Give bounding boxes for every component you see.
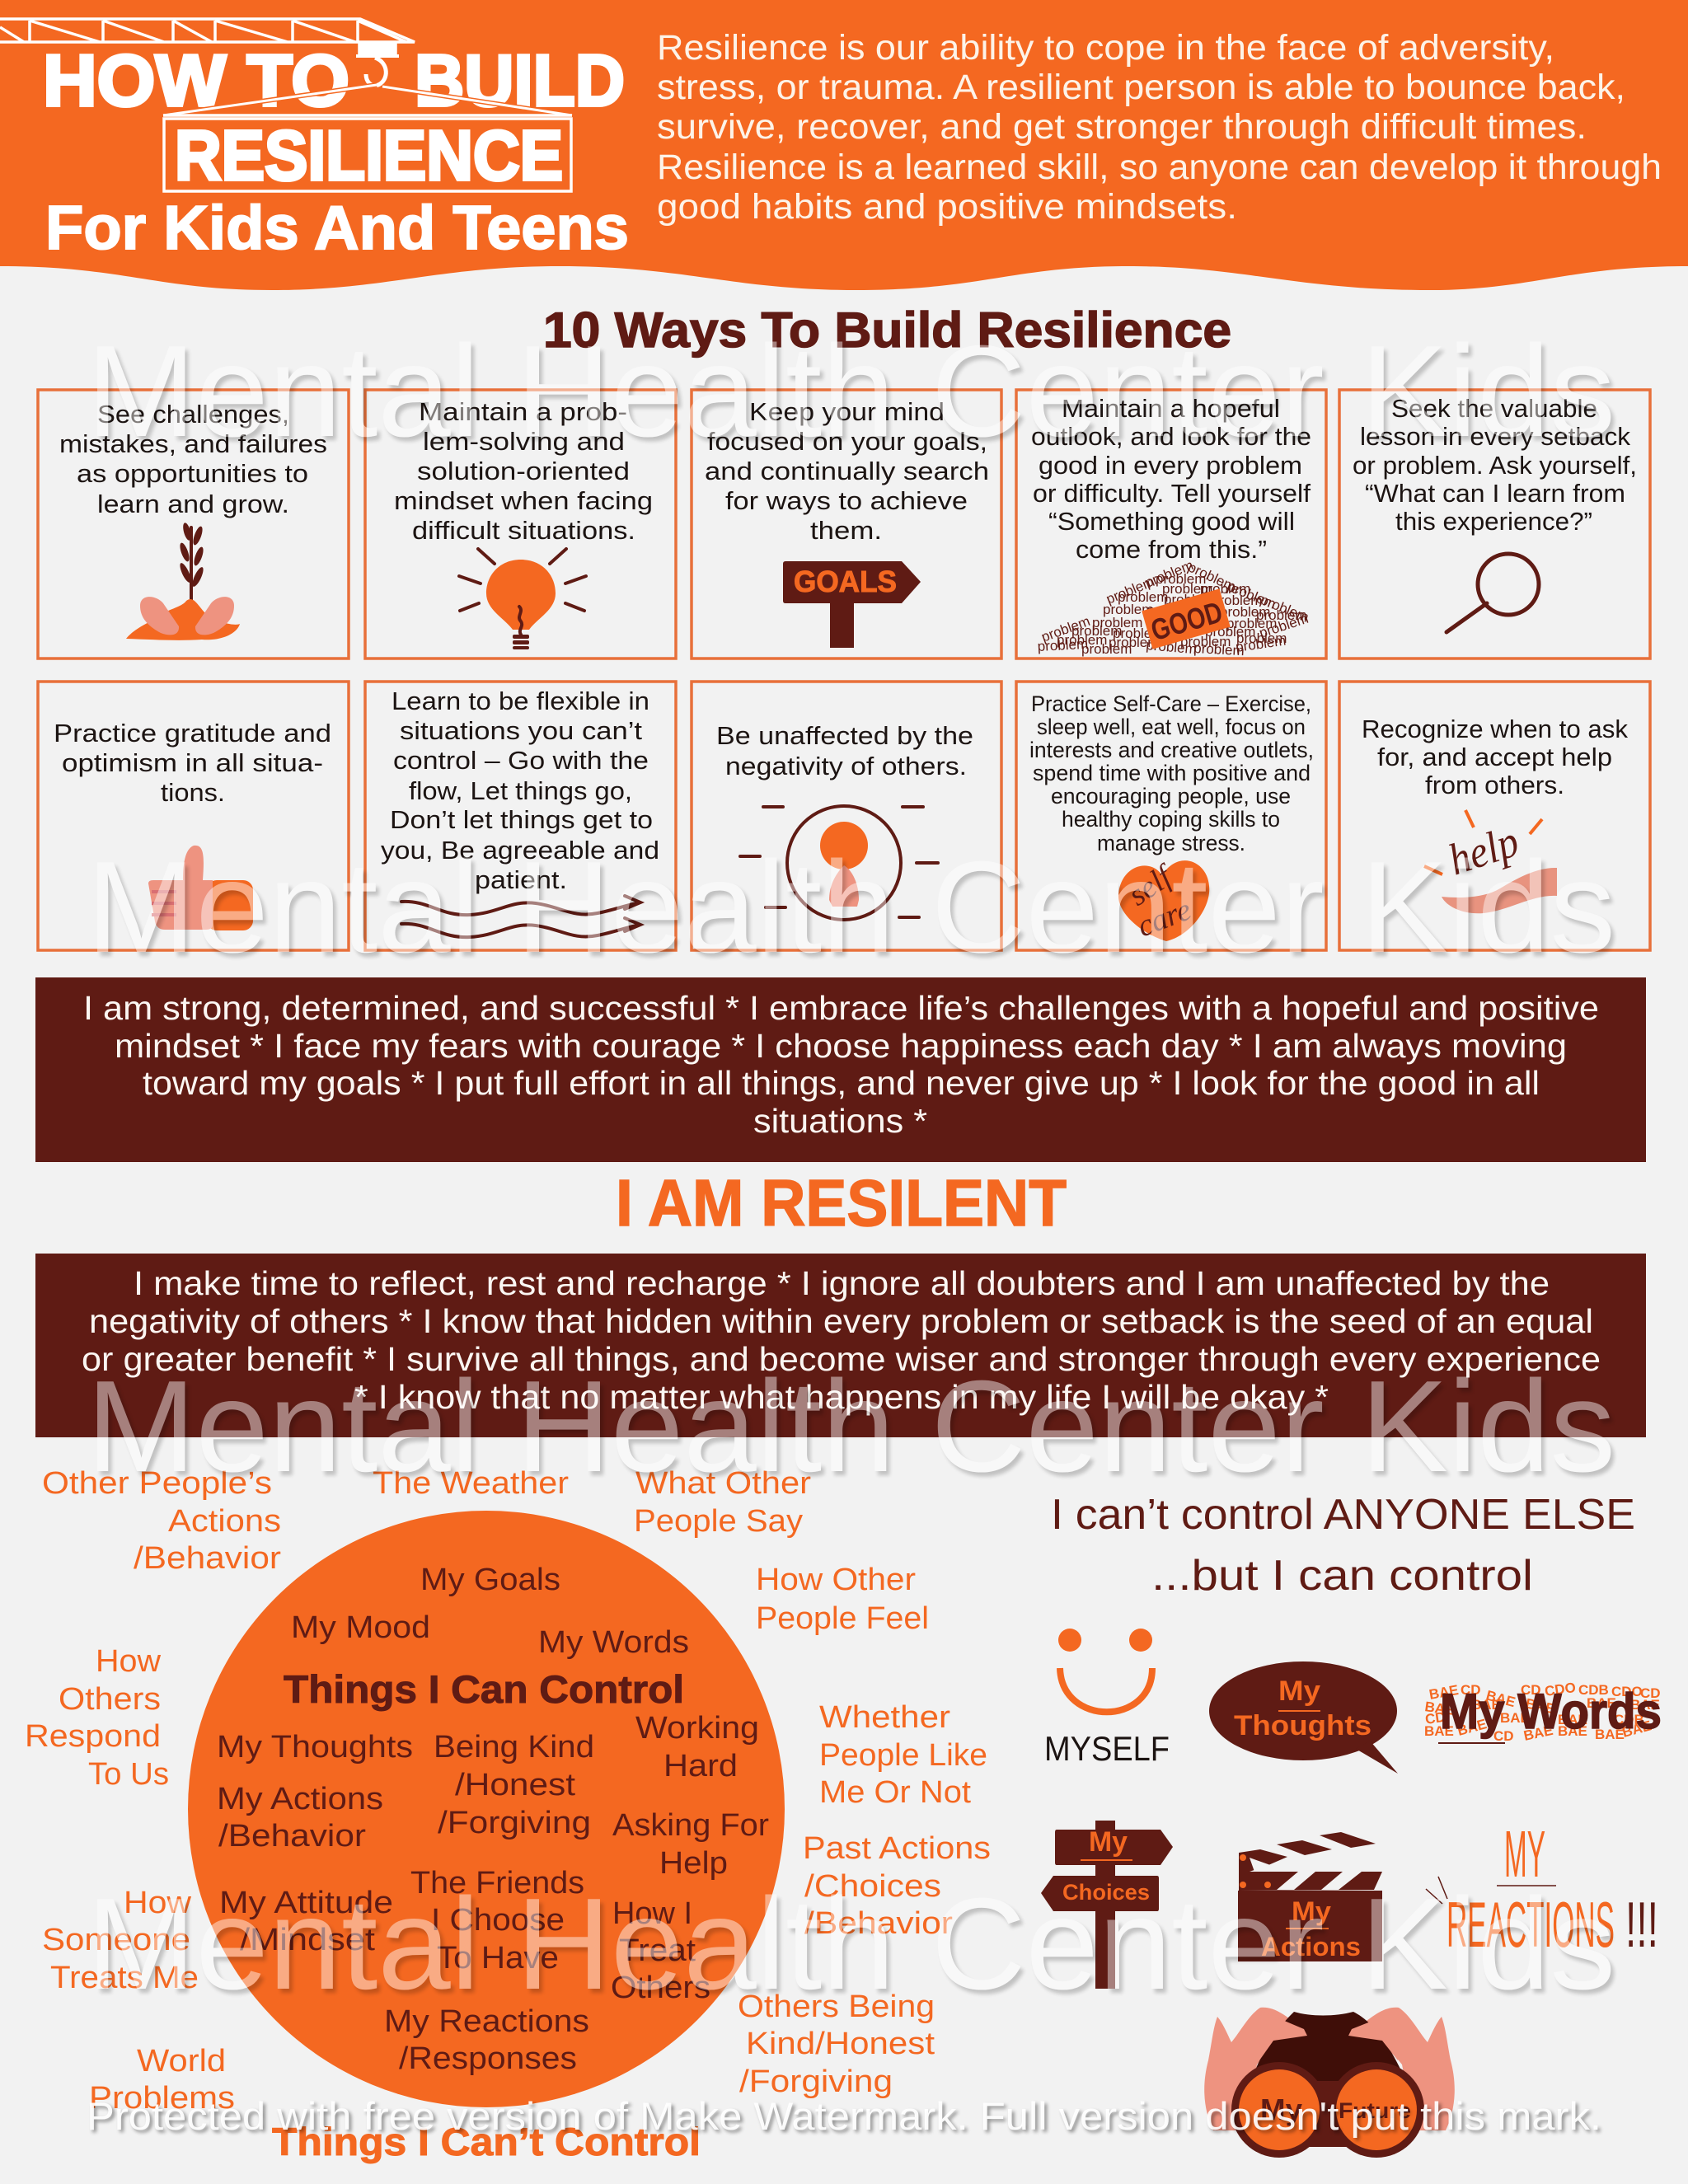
text: way 1 [59,400,327,518]
header banner [0,0,1688,290]
text: way 6 [54,719,331,807]
word pile: problem [1205,624,1255,640]
text: way 4: come from this.” [1076,535,1267,564]
title: for kids and teens: For Kids And Teens [45,193,629,262]
icon: my future binoculars [1204,2008,1455,2158]
icon: my choices signpost: My [1089,1826,1128,1858]
text: way 7 [381,687,659,894]
icon: goals sign: GOALS [794,565,897,598]
text: way 3: Keep your mind [749,397,945,426]
icon: good within problem pile [1037,557,1311,658]
icon: my reactions lettering [1426,1817,1658,1961]
affirmation text 2 [82,1264,1601,1416]
things I can control list: /Mindset [240,1923,375,1957]
scattered letters: CDB [1614,1712,1644,1727]
affirmation text 1 [83,989,1599,1140]
text: way 5: “What can I learn from [1365,479,1625,508]
intro text [657,28,1662,227]
watermarks: Mental Health Center Kids [87,1354,1615,1499]
watermarks: Mental Health Center Kids [87,835,1615,980]
icon: my thoughts bubble: Thoughts [1234,1710,1372,1741]
text: way 1: See challenges, [97,400,289,429]
word pile: problem [1039,613,1092,645]
title: resilience box: RESILIENCE [175,117,563,195]
scattered letters: BAE [1558,1712,1587,1727]
things I can control list: My Attitude [219,1886,393,1920]
things I can't control list: /Choices [804,1869,941,1904]
word pile: problem [1164,592,1214,607]
text: way 10: Recognize when to ask [1362,715,1628,743]
things I can control list: The Friends [410,1866,584,1900]
word pile: problem [1118,589,1168,605]
text: way 5 [1353,394,1637,536]
word pile: problem [1156,571,1206,587]
text: way 7: patient. [475,865,567,894]
panel: way 8 unaffected [692,682,1001,950]
watermarks: Protected with free version of Make Watermark. Full version doesn't put this mark. [87,2094,1601,2138]
scattered letters: CD [1640,1685,1661,1701]
affirmation text 2: negativity of others * I know that hidden within every problem or setback is the seed of an equal [89,1302,1593,1340]
panel: way 1 challenges [38,390,349,658]
icon: my actions clapperboard: Actions [1261,1932,1361,1961]
things I can't control list: Others [59,1682,161,1717]
scattered letters: CDO [1611,1684,1643,1699]
things I can control list: My Reactions [384,2004,589,2039]
text: way 4: Maintain a hopeful [1062,394,1280,423]
scattered letters: BAE [1471,1697,1501,1713]
things I can't control list: People Say [634,1504,803,1539]
icon: my choices signpost [1041,1821,1173,1989]
text: way 4: or difficulty. Tell yourself [1033,479,1311,508]
word pile: problem [1103,602,1153,617]
icon: sprout in hands [126,522,240,640]
word pile: problem [1113,626,1163,641]
intro text: survive, recover, and get stronger through difficult times. [657,107,1587,147]
scattered letters: BAE [1428,1682,1460,1703]
word pile: problem [1147,602,1198,618]
text: way 8: Be unaffected by the [716,721,973,750]
text: way 4: good in every problem [1039,451,1302,480]
affirmation text 1: mindset * I face my fears with courage * I choose happiness each day * I am always moving [115,1027,1567,1065]
panel: way 6 gratitude [38,682,349,950]
things I can control list: Being Kind [434,1730,594,1765]
text: way 2: difficult situations. [412,516,635,545]
text: way 2: Maintain a prob- [419,397,627,426]
icon: thumbs up [148,846,253,930]
word pile: problem [1180,634,1231,649]
icon: light bulb [459,549,586,649]
things I can't control list: Other People’s [42,1466,272,1501]
affirmation text 1: toward my goals * I put full effort in all things, and never give up * I look for the good in all [143,1064,1540,1102]
text: way 9: encouraging people, use [1051,784,1291,808]
scattered letters: BAE [1587,1695,1616,1711]
panel: way 4 hopeful outlook [1016,390,1326,658]
text: way 9: manage stress. [1097,831,1245,855]
things I can't control list: Others Being [738,1990,935,2024]
watermarks [87,319,1615,2138]
panel: way 7 flexibility [365,682,676,950]
text: way 5: or problem. Ask yourself, [1353,451,1637,480]
text: way 9: interests and creative outlets, [1029,738,1314,762]
things I can control list: My Actions [217,1782,383,1816]
things I can control list: /Behavior [218,1819,366,1854]
text: way 9: healthy coping skills to [1062,807,1280,832]
things I can control list: /Forgiving [438,1806,591,1840]
things I can control list: /Honest [455,1768,575,1802]
text: way 8: negativity of others. [725,752,967,780]
affirmations band 2 [35,1254,1646,1437]
text: way 9: spend time with positive and [1033,761,1311,785]
things I can't control list: /Forgiving [739,2064,893,2099]
text: way 9: Practice Self-Care – Exercise, [1031,691,1311,716]
scattered letters: BAE [1423,1699,1456,1718]
things I can't control list: Me Or Not [819,1775,971,1810]
things I can control list: Asking For [612,1808,769,1843]
things I can't control list: People Feel [756,1601,929,1636]
icon: my choices signpost: Choices [1062,1880,1150,1905]
text: way 10: from others. [1425,771,1564,799]
title: how to build [43,40,625,121]
icon: crane truss and hook [0,19,572,115]
word pile: problem [1142,557,1195,591]
watermarks: Mental Health Center Kids [87,1872,1615,2017]
text: way 3: and continually search [705,457,989,485]
text: way 10 [1362,715,1628,799]
title: how to build: HOW TO [43,40,349,121]
scattered letters: CDO [1544,1680,1577,1699]
text: way 2: lem-solving and [423,427,625,456]
word pile [1037,557,1311,658]
word pile: problem [1226,579,1278,612]
icon: my future binoculars: Future [1339,2098,1411,2123]
icon: helping hand [1424,810,1557,913]
heading: I can't control anyone else [1051,1491,1635,1600]
icon: my reactions lettering: MY [1504,1817,1545,1891]
word pile: problem [1092,615,1142,630]
scattered letters: BAE [1456,1716,1489,1739]
panel: way 10 accept help [1339,682,1650,950]
icon: self care heart: care [1132,892,1196,944]
intro text: Resilience is a learned skill, so anyone can develop it through [657,148,1662,187]
icon: my actions clapperboard: My [1292,1896,1331,1926]
scattered letters [1423,1680,1661,1744]
word pile: problem [1185,559,1238,595]
text: way 8 [716,721,973,780]
things I can't control list: World [137,2044,226,2079]
text: way 6: Practice gratitude and [54,719,331,748]
text: way 3: for ways to achieve [725,486,968,515]
text: way 9 [1029,691,1314,855]
icon: my thoughts bubble [1209,1661,1398,1774]
things I can't control list: How [124,1886,192,1920]
text: way 5: lesson in every setback [1360,422,1631,451]
text: way 4: “Something good will [1048,507,1295,536]
scattered letters: BAE [1500,1710,1530,1726]
things I can control list: Working [635,1711,759,1746]
word pile: problem [1071,623,1122,639]
text: way 10: for, and accept help [1377,743,1612,771]
affirmation text 2: I make time to reflect, rest and recharge * I ignore all doubters and I am unaffected by the [134,1264,1550,1302]
text: way 6: tions. [161,778,225,807]
text: way 2 [394,397,653,545]
text: way 7: situations you can’t [400,716,642,745]
word pile: problem [1200,581,1250,597]
icon: my actions clapperboard [1238,1832,1382,1961]
word pile: problem [1057,632,1107,648]
heading: 10 ways: 10 Ways To Build Resilience [543,302,1231,358]
scattered letters: CD [1521,1682,1541,1698]
chart: circle of control [188,1511,785,2107]
panel: way 5 valuable lesson [1339,390,1650,658]
things I can control list: /Responses [399,2041,577,2076]
good label: GOOD [1147,595,1226,647]
title block with crane [0,19,629,262]
scattered letters: BAE [1620,1718,1653,1741]
scattered letters: BAE [1630,1697,1660,1713]
panel: way 3 goals [692,390,1001,658]
things I can control list: My Thoughts [217,1730,413,1765]
things I can't control list: Treats Me [50,1961,199,1995]
things I can't control list: The Weather [373,1466,569,1501]
things I can't control list: How Other [756,1563,916,1597]
word pile: problem [1236,630,1287,646]
things I can't control list: Things I Can’t Control [272,2120,701,2163]
text: way 3 [705,397,989,545]
scattered letters: BAE [1524,1695,1556,1717]
text: way 3: focused on your goals, [707,427,987,456]
text: way 7: Don’t let things get to [390,805,653,834]
scattered letters: BAE [1558,1723,1587,1739]
affirmation text 2: or greater benefit * I survive all things, and become wiser and stronger through every experience [82,1340,1601,1378]
icon: person in shield circle [740,806,938,920]
things I can't control list: Respond [25,1719,161,1754]
things I can't control list: To Us [88,1757,169,1792]
scattered letters: CD [1424,1709,1447,1727]
icon: self care heart: self [1123,858,1180,912]
watermarks: Mental Health Center Kids [87,319,1615,464]
things I can control list: Things I Can Control [284,1667,684,1711]
word pile: problem [1037,636,1089,654]
word pile: problem [1235,633,1287,655]
text: way 7: Learn to be flexible in [392,687,649,715]
icon: goals sign [783,561,921,648]
scattered letters: CD [1461,1682,1481,1698]
scattered letters: BAE [1522,1722,1554,1744]
panel: way 2 problem solving [365,390,676,658]
text: way 1: mistakes, and failures [59,429,327,458]
text: way 1: as opportunities to [77,459,308,488]
things I can't control list: Kind/Honest [746,2027,935,2061]
things I can control list: Treat [619,1933,696,1968]
text: way 6: optimism in all situa- [62,748,323,777]
icon: myself smile: MYSELF [1044,1729,1170,1768]
affirmation text 2: * I know that no matter what happens in my life I will be okay * [354,1378,1329,1416]
affirmations band 1 [35,977,1646,1162]
things I can't control list: /Behavior [134,1541,281,1576]
icon: wavy arrows [401,896,640,937]
text: way 7: you, Be agreeable and [381,836,659,865]
icon: self care heart [1118,858,1209,944]
heading: I am resilent: I AM RESILENT [616,1166,1067,1240]
text: way 7: flow, Let things go, [409,776,632,805]
heading: I can't control anyone else: ...but I can control [1151,1552,1533,1600]
word pile: problem [1146,637,1197,657]
icon: helping hand: help [1442,816,1525,884]
scattered letters: BAE [1484,1688,1517,1710]
text: way 4: outlook, and look for the [1031,422,1311,451]
word pile: problem [1104,574,1156,607]
panel: way 9 self care [1016,682,1326,950]
things I can control list: My Words [538,1625,689,1660]
text: way 5: Seek the valuable [1391,394,1597,423]
things I can control list: Help [659,1846,728,1881]
scattered letters: BAE [1595,1727,1625,1742]
things I can't control list [25,1466,991,2163]
text: way 4 [1031,394,1311,564]
affirmation text 1: I am strong, determined, and successful * I embrace life’s challenges with a hopeful and positive [83,989,1599,1027]
things I can control list: How I [612,1896,692,1931]
word pile: problem [1081,641,1132,657]
title: how to build: BUILD [415,40,625,121]
text: way 1: learn and grow. [97,490,289,518]
icon: my reactions lettering: !!! [1625,1888,1658,1961]
things I can't control list: Actions [168,1504,281,1539]
things I can't control list: People Like [819,1738,987,1773]
word pile: problem [1193,640,1245,658]
icon: magnifying glass [1447,554,1539,632]
scattered letters: CDB [1578,1682,1609,1698]
things I can control list [217,1563,769,2076]
things I can't control list: Whether [819,1700,950,1735]
text: way 5: this experience?” [1395,507,1592,536]
icon: my words: My Words [1440,1684,1662,1739]
text: way 3: them. [810,516,882,545]
word pile: problem [1226,616,1277,631]
word pile: problem [1259,592,1311,626]
text: way 9: sleep well, eat well, focus on [1037,715,1306,739]
word pile: problem [1256,607,1306,623]
word pile: problem [1220,604,1270,620]
icon: my thoughts bubble: My [1278,1675,1320,1707]
scattered letters: CD [1493,1728,1514,1744]
things I can't control list: What Other [635,1466,811,1501]
text: way 7: control – Go with the [393,746,649,775]
things I can control list: My Goals [420,1563,560,1597]
word pile: problem [1257,611,1311,641]
word pile: problem [1162,581,1212,597]
things I can control list: I Choose [431,1903,565,1938]
things I can control list: Hard [663,1749,738,1783]
things I can't control list: Problems [89,2081,235,2116]
things I can't control list: How [96,1644,162,1679]
things I can't control list: /Behavior [804,1906,953,1941]
icon: my future binoculars: My [1260,2093,1302,2126]
word pile: problem [1212,593,1262,608]
intro text: good habits and positive mindsets. [657,187,1237,227]
icon: myself smile [1044,1629,1170,1768]
things I can control list: To Have [437,1941,559,1975]
heading: I can't control anyone else: I can’t control ANYONE ELSE [1051,1491,1635,1539]
text: way 2: solution-oriented [417,457,630,485]
affirmation text 1: situations * [753,1102,927,1140]
word pile: problem [1109,635,1159,650]
text: way 2: mindset when facing [394,486,653,515]
things I can control list: Others [611,1971,710,2005]
things I can't control list: Someone [42,1923,190,1957]
things I can't control list: Past Actions [803,1831,991,1866]
things I can control list: My Mood [291,1610,430,1645]
scattered letters: BAE [1424,1723,1454,1739]
intro text: Resilience is our ability to cope in the face of adversity, [657,28,1554,68]
intro text: stress, or trauma. A resilient person is able to bounce back, [657,68,1625,107]
